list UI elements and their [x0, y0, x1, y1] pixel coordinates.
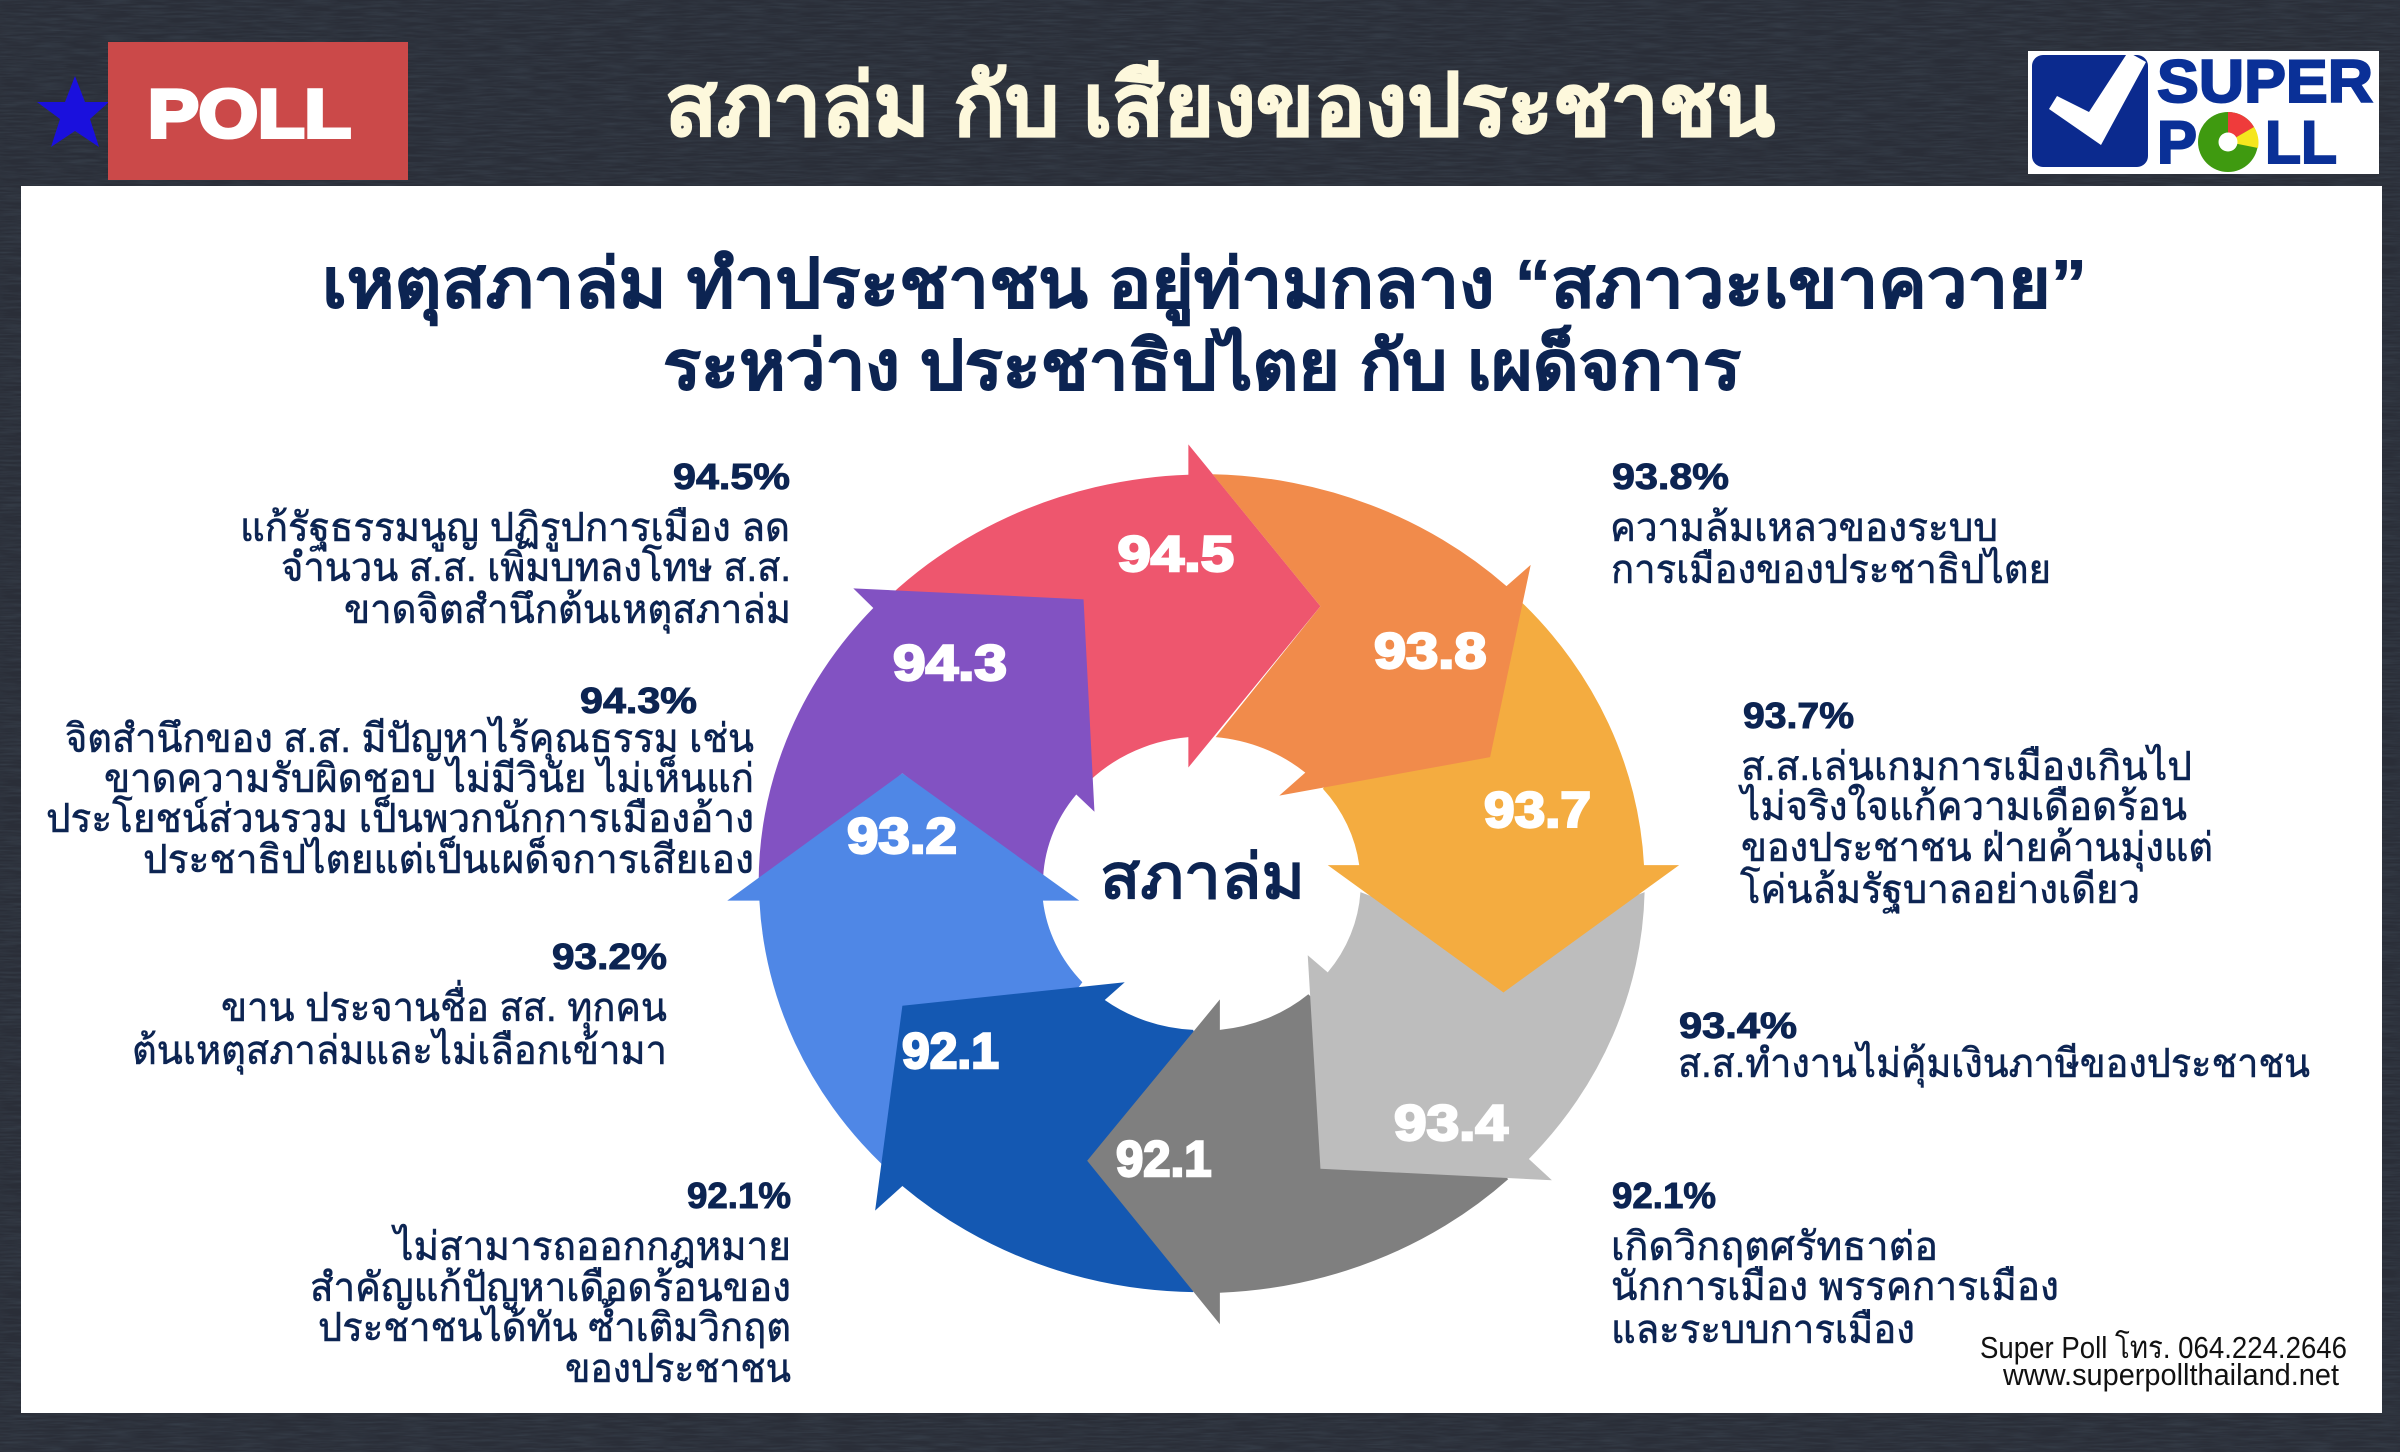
- text block: 92.1% left: 92.1%: [687, 1175, 791, 1216]
- text block: 93.8%: ความล้มเหลวของระบบ: [1610, 506, 1998, 550]
- text block: 92.1% right: และระบบการเมือง: [1611, 1308, 1915, 1352]
- text block: 92.1% right: 92.1%: [1612, 1175, 1716, 1216]
- wheel values: 92.1: [902, 1023, 999, 1079]
- text block: 92.1% left: สำคัญแก้ปัญหาเดือดร้อนของ: [310, 1266, 791, 1310]
- text block: 92.1% right: [1611, 1175, 2059, 1352]
- footer contact: [1980, 1330, 2347, 1392]
- text block: 93.7%: ส.ส.เล่นเกมการเมืองเกินไป: [1741, 744, 2192, 789]
- wheel values: 94.5: [1118, 526, 1234, 582]
- text block: 94.3%: 94.3%: [580, 680, 697, 721]
- text block: 94.3%: จิตสำนึกของ ส.ส. มีปัญหาไร้คุณธรรม เช่น: [65, 716, 754, 763]
- text block: 94.3%: ประโยชน์ส่วนรวม เป็นพวกนักการเมืองอ้าง: [46, 794, 754, 841]
- text block: 94.5%: ขาดจิตสำนึกต้นเหตุสภาล่ม: [344, 588, 791, 634]
- text block: 93.8%: การเมืองของประชาธิปไตย: [1611, 547, 2051, 592]
- text block: 94.3%: [46, 680, 754, 882]
- text block: 93.7%: โค่นล้มรัฐบาลอย่างเดียว: [1740, 867, 2140, 914]
- text block: 93.2%: 93.2%: [552, 936, 667, 977]
- wheel values: 93.7: [1484, 782, 1591, 838]
- badge: POLL: POLL: [148, 76, 351, 152]
- text block: 93.2%: [132, 936, 667, 1075]
- logo: Super Poll: SUPER: [2157, 48, 2373, 115]
- text block: 94.5%: แก้รัฐธรรมนูญ ปฏิรูปการเมือง ลด: [240, 506, 790, 552]
- text block: 93.4%: [1678, 1005, 2310, 1088]
- title: สภาล่ม กับ เสียงของประชาชน: [665, 58, 1775, 154]
- center label: สภาล่ม: [1100, 843, 1305, 912]
- heading: เหตุสภาล่ม ทำประชาชน อยู่ท่ามกลาง “สภาวะเขาควาย”: [322, 246, 2087, 327]
- logo: Super Poll: LL: [2265, 109, 2337, 176]
- heading: [322, 246, 2087, 404]
- text block: 93.4%: ส.ส.ทำงานไม่คุ้มเงินภาษีของประชาชน: [1678, 1041, 2310, 1088]
- arrow: 92.1 dark blue: [875, 982, 1225, 1292]
- wheel values: [847, 526, 1591, 1187]
- arrow: 94.5 red: [861, 444, 1320, 792]
- text block: 94.5%: 94.5%: [673, 456, 790, 497]
- text block: 93.8%: [1610, 456, 2051, 592]
- text block: 93.7%: ไม่จริงใจแก้ความเดือดร้อน: [1738, 783, 2187, 829]
- arrow: 93.4 light gray: [1308, 892, 1645, 1180]
- logo: Super Poll: P: [2157, 109, 2197, 176]
- text block: 94.3%: ประชาธิปไตยแต่เป็นเผด็จการเสียเอง: [143, 835, 754, 882]
- logo: Super Poll: [2028, 48, 2379, 176]
- text block: 93.8%: 93.8%: [1612, 456, 1729, 497]
- text block: 92.1% left: ไม่สามารถออกกฎหมาย: [391, 1224, 791, 1269]
- wheel values: 92.1: [1116, 1131, 1212, 1187]
- text block: 94.5%: [240, 456, 791, 634]
- footer contact: Super Poll โทร. 064.224.2646: [1980, 1330, 2347, 1365]
- wheel values: 93.2: [847, 808, 957, 864]
- text block: 92.1% left: ประชาชนได้ทัน ซ้ำเติมวิกฤต: [318, 1298, 791, 1350]
- arrow: 94.3 purple: [759, 588, 1094, 892]
- wheel values: 93.4: [1394, 1095, 1508, 1151]
- text block: 94.3%: ขาดความรับผิดชอบ ไม่มีวินัย ไม่เห็นแก่: [104, 754, 754, 801]
- text block: 93.2%: ต้นเหตุสภาล่มและไม่เลือกเข้ามา: [132, 1028, 667, 1075]
- arrow: 92.1 gray: [1087, 994, 1508, 1324]
- text block: 93.7%: 93.7%: [1743, 695, 1854, 736]
- text block: 92.1% right: นักการเมือง พรรคการเมือง: [1611, 1265, 2059, 1309]
- arrow: 93.2 light blue: [727, 773, 1082, 1165]
- text block: 93.2%: ขาน ประจานชื่อ สส. ทุกคน: [221, 980, 667, 1032]
- wheel values: 93.8: [1374, 623, 1486, 679]
- icon: blue star: [37, 76, 109, 147]
- text block: 94.5%: จำนวน ส.ส. เพิ่มบทลงโทษ ส.ส.: [281, 540, 791, 590]
- heading: ระหว่าง ประชาธิปไตย กับ เผด็จการ: [663, 325, 1741, 404]
- badge: POLL: [108, 42, 408, 180]
- arrow: 93.8 orange: [1213, 474, 1531, 796]
- text block: 92.1% right: เกิดวิกฤตศรัทธาต่อ: [1611, 1225, 1938, 1269]
- arrow: 93.7 yellow: [1323, 602, 1679, 993]
- text block: 92.1% left: ของประชาชน: [565, 1347, 791, 1391]
- text block: 93.4%: 93.4%: [1679, 1005, 1797, 1046]
- footer contact: www.superpollthailand.net: [2002, 1357, 2339, 1392]
- text block: 93.7%: [1738, 695, 2213, 914]
- chart: circular arrow wheel: [727, 444, 1679, 1324]
- text block: 92.1% left: [310, 1175, 791, 1391]
- wheel values: 94.3: [893, 635, 1007, 691]
- text block: 93.7%: ของประชาชน ฝ่ายค้านมุ่งแต่: [1741, 826, 2213, 872]
